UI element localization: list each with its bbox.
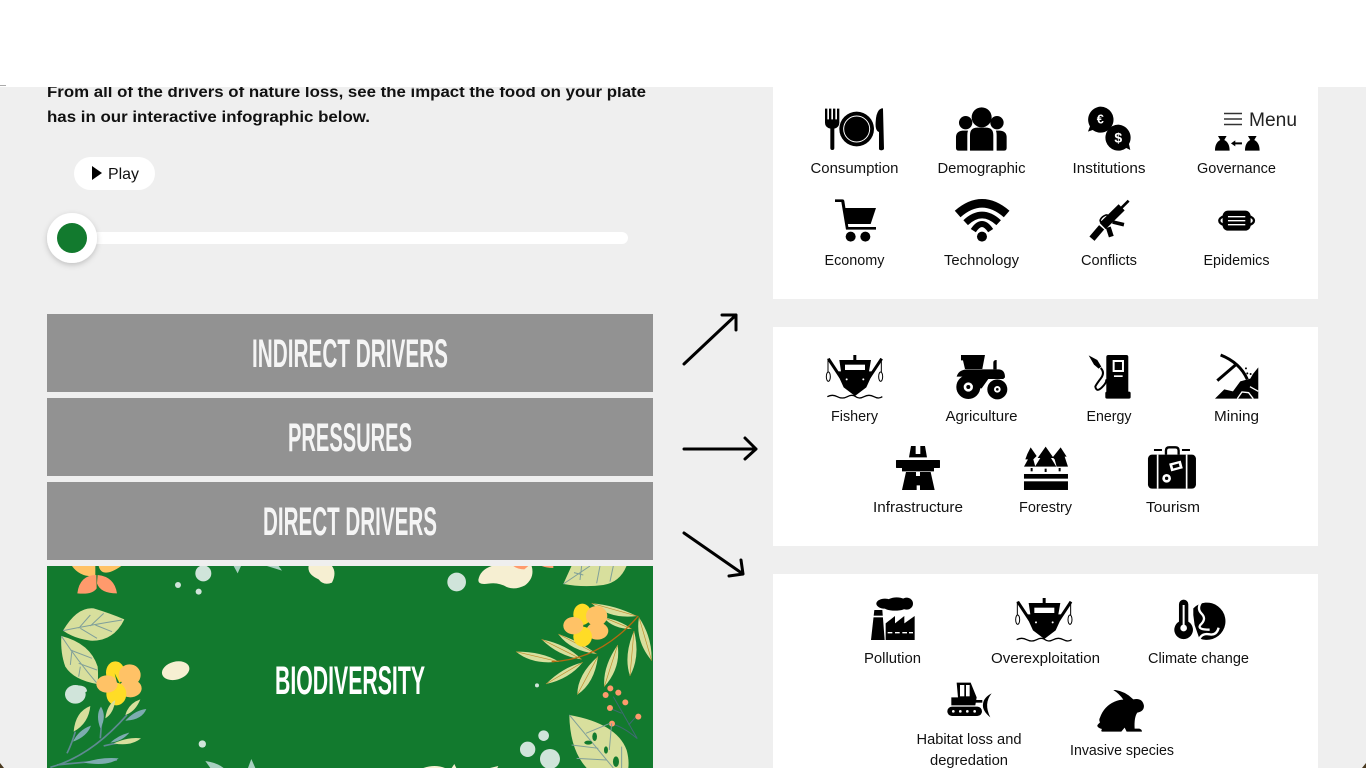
panel: direct drivers icons — [773, 574, 1318, 768]
label: Institutions — [1072, 160, 1146, 177]
label: Climate change — [1148, 650, 1249, 667]
header bar — [0, 0, 1366, 87]
icon: infrastructure — [896, 446, 940, 490]
icon: pollution — [871, 597, 915, 640]
icon: mining — [1215, 355, 1258, 399]
label: Agriculture — [946, 408, 1018, 425]
icon: institutions: $ — [1114, 130, 1122, 146]
icon: governance — [1215, 135, 1260, 151]
window corners — [0, 763, 1366, 768]
label: Infrastructure — [873, 499, 963, 516]
icon: agriculture — [956, 355, 1007, 399]
label: Epidemics — [1204, 252, 1270, 269]
icon: institutions — [1088, 107, 1131, 151]
bar: pressures: PRESSURES — [288, 416, 412, 460]
label: Pollution — [864, 650, 921, 667]
panel: biodiversity — [47, 565, 653, 768]
icon: economy — [835, 199, 876, 242]
floral decoration left — [50, 565, 334, 768]
biodiversity title: BIODIVERSITY — [275, 659, 425, 703]
bar: direct drivers — [47, 482, 653, 560]
label: Technology — [944, 252, 1019, 269]
icon: technology — [958, 203, 1007, 242]
label: Invasive species — [1070, 742, 1174, 759]
label: Overexploitation — [991, 650, 1100, 667]
bar: pressures — [47, 398, 653, 476]
label: Forestry — [1019, 499, 1072, 516]
label: Consumption — [810, 160, 898, 177]
icon: demographic — [956, 107, 1007, 151]
arrow up — [684, 315, 736, 364]
label: Habitat loss and — [916, 731, 1022, 748]
icon: consumption — [825, 108, 884, 150]
menu button — [1200, 100, 1310, 136]
icon: epidemics — [1219, 211, 1254, 231]
timeline slider — [47, 213, 628, 263]
icon: invasive species — [1097, 690, 1144, 732]
bar: indirect drivers: INDIRECT DRIVERS — [252, 332, 448, 376]
icon: fishery — [826, 355, 883, 398]
panel: pressures icons — [773, 327, 1318, 546]
label: Economy — [824, 252, 885, 269]
icon: energy — [1089, 355, 1131, 399]
play button: Play — [108, 166, 139, 183]
icon: tourism — [1148, 447, 1196, 489]
icon: institutions: € — [1097, 113, 1104, 127]
bar: direct drivers: DIRECT DRIVERS — [263, 500, 437, 544]
intro text: From all of the drivers of nature loss, see the impact the food on your plate — [47, 84, 646, 101]
icon: forestry — [1024, 447, 1068, 490]
label: Governance — [1197, 160, 1276, 177]
panel: indirect drivers icons — [773, 80, 1318, 299]
label: Conflicts — [1081, 252, 1137, 269]
label: Energy — [1086, 408, 1132, 425]
arrow down — [684, 533, 743, 576]
icon: habitat loss — [947, 683, 992, 717]
label: Fishery — [831, 408, 878, 425]
label: Tourism — [1146, 499, 1200, 516]
bar: indirect drivers — [47, 314, 653, 392]
icon: climate change — [1174, 600, 1225, 640]
arrow right — [684, 438, 756, 459]
label: Demographic — [938, 160, 1026, 177]
icon: overexploitation — [1016, 598, 1072, 641]
intro text — [47, 84, 646, 126]
menu button: Menu — [1249, 110, 1297, 131]
icon: conflicts — [1092, 201, 1129, 239]
play button — [74, 157, 155, 190]
intro text: has in our interactive infographic below. — [47, 109, 370, 126]
floral decoration right — [423, 566, 652, 768]
label: Mining — [1214, 408, 1259, 425]
